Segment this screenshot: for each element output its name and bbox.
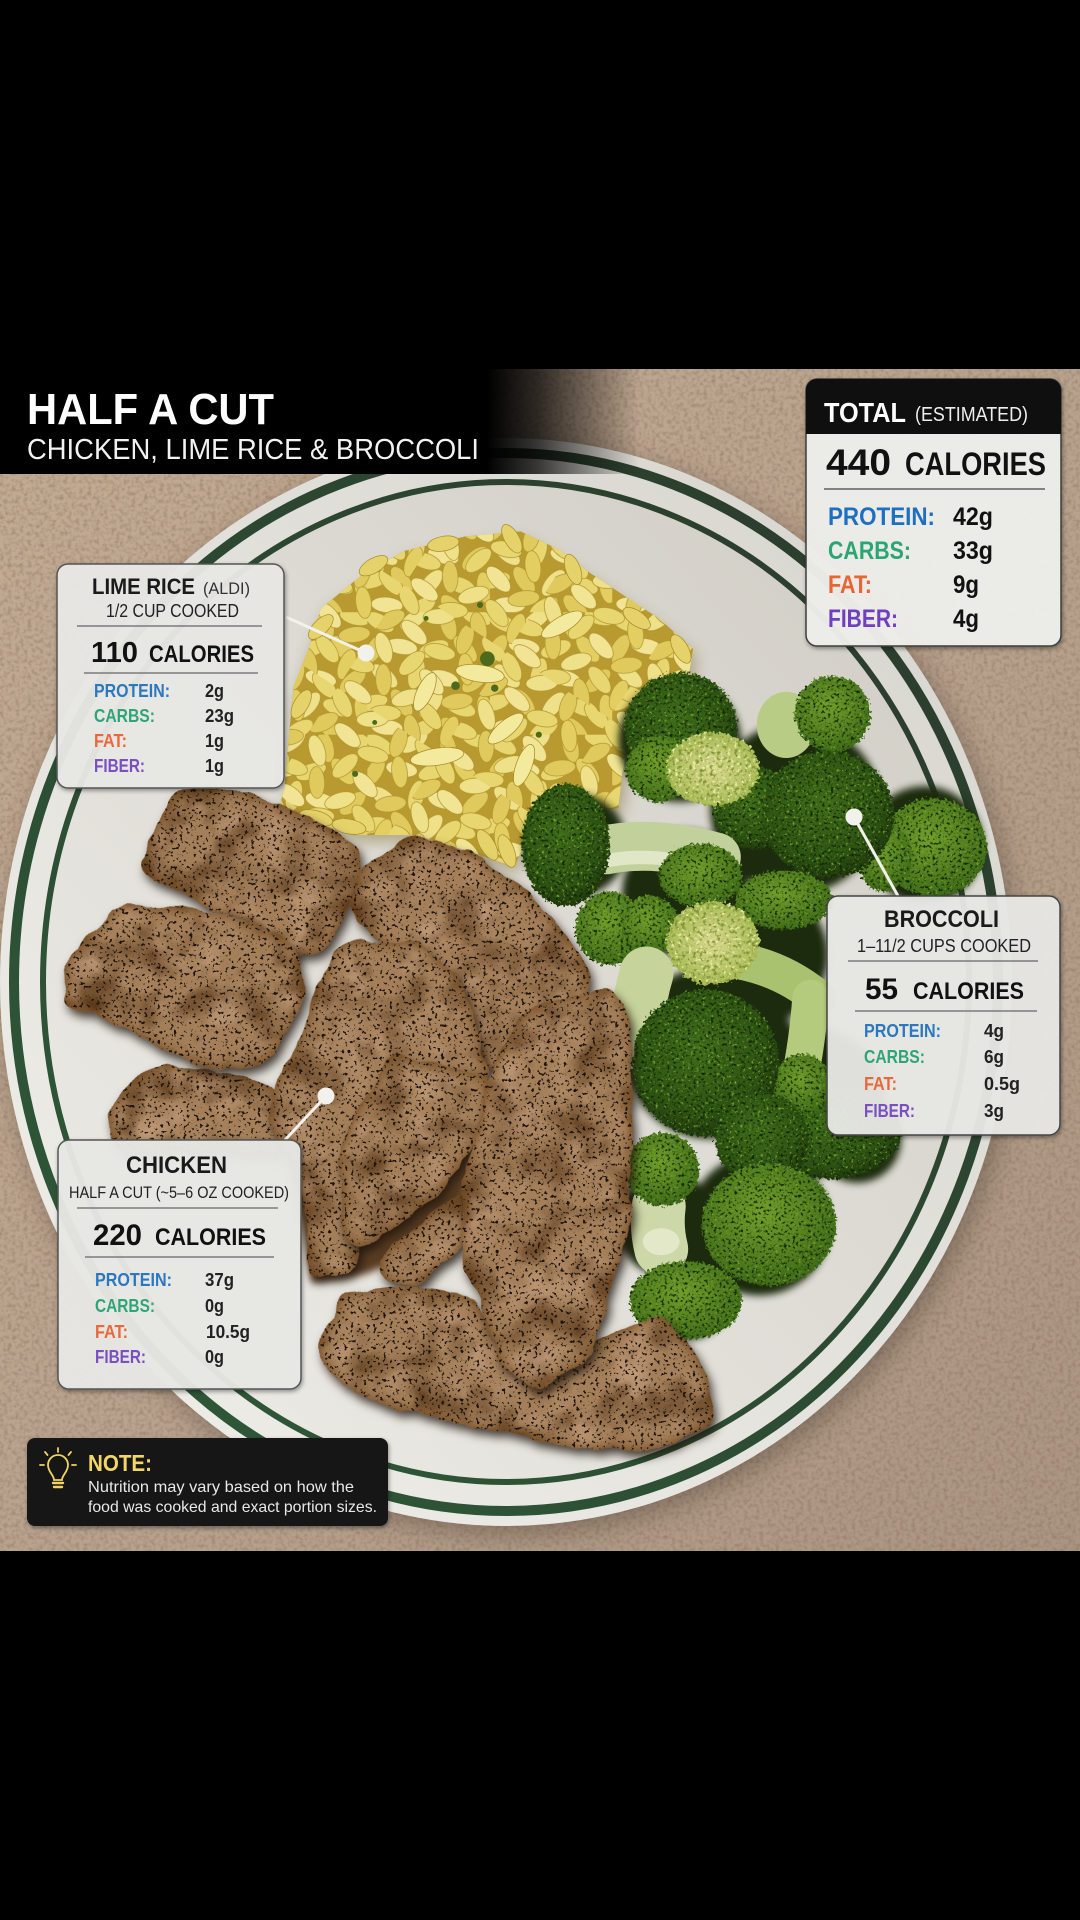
lime rice calories <box>91 637 254 669</box>
card body <box>58 1140 301 1389</box>
broccoli: pale head centre <box>666 901 759 984</box>
broccoli: centre dark floret <box>711 765 779 851</box>
total macros: 9g <box>953 571 979 599</box>
chicken calories: 220 <box>93 1219 142 1252</box>
broccoli macros: PROTEIN: <box>864 1021 941 1041</box>
chicken macros: FAT: <box>95 1322 128 1342</box>
broccoli: pale tube <box>658 1206 661 1249</box>
chicken macros: 37g <box>205 1270 234 1290</box>
chicken macros: CARBS: <box>95 1296 155 1316</box>
lime rice macros: PROTEIN: <box>94 681 170 701</box>
total calories: CALORIES <box>905 446 1046 482</box>
card header <box>806 379 1061 434</box>
subtitle: CHICKEN, LIME RICE & BROCCOLI <box>27 434 479 466</box>
icon: light bulb <box>40 1448 76 1487</box>
lime rice heading <box>92 574 250 621</box>
chicken piece: bottom <box>320 1286 710 1450</box>
chicken piece: small <box>383 1190 468 1288</box>
lime rice macros: 2g <box>205 681 224 701</box>
lime rice calories: 110 <box>91 637 138 669</box>
broccoli <box>522 672 987 1340</box>
chicken piece: left <box>61 904 306 1070</box>
chicken piece: centre left strip <box>264 940 490 1283</box>
connector: chicken <box>285 1088 334 1140</box>
lime rice macros: FIBER: <box>94 756 145 776</box>
broccoli: bottom floret <box>629 1261 742 1340</box>
broccoli: left dark floret <box>522 784 610 906</box>
broccoli macros: FAT: <box>864 1074 897 1094</box>
lime rice macros: CARBS: <box>94 706 155 726</box>
plate <box>0 438 1012 1526</box>
panel: lime rice <box>57 564 284 788</box>
broccoli macros: CARBS: <box>864 1047 925 1067</box>
chicken piece: lower left <box>104 1063 288 1157</box>
chicken <box>61 789 710 1450</box>
broccoli macros: 0.5g <box>984 1074 1020 1094</box>
card header: TOTAL <box>824 397 906 428</box>
chicken heading: CHICKEN <box>126 1152 227 1179</box>
broccoli macros: 3g <box>984 1101 1004 1121</box>
title: HALF A CUT <box>27 385 274 434</box>
broccoli heading: BROCCOLI <box>884 906 999 933</box>
chicken calories: CALORIES <box>155 1224 266 1251</box>
plate shadow <box>6 446 1018 1534</box>
total macros: 33g <box>953 537 993 565</box>
lime rice heading: 1/2 CUP COOKED <box>106 601 239 621</box>
chicken macros: PROTEIN: <box>95 1270 172 1290</box>
note heading: NOTE: <box>88 1450 152 1476</box>
total macros: FIBER: <box>828 605 898 633</box>
photo: plate of food on table <box>0 369 1080 1551</box>
chicken macros: FIBER: <box>95 1347 146 1367</box>
broccoli heading: 1–11/2 CUPS COOKED <box>857 936 1031 956</box>
broccoli macros: 4g <box>984 1021 1004 1041</box>
total macros: 42g <box>953 503 993 531</box>
total calories: 440 <box>826 442 891 483</box>
chicken piece: centre top <box>347 836 594 1070</box>
chicken piece: centre lump <box>343 1053 492 1247</box>
card header: (ESTIMATED) <box>915 404 1028 426</box>
rice <box>269 520 710 876</box>
chicken macros: 0g <box>205 1347 224 1367</box>
lime rice heading: LIME RICE <box>92 574 195 599</box>
note text <box>88 1479 377 1516</box>
card body <box>806 379 1061 646</box>
chicken macros: 0g <box>205 1296 224 1316</box>
broccoli: left stems <box>606 846 716 864</box>
chicken macros: 10.5g <box>206 1322 250 1342</box>
broccoli calories <box>865 973 1024 1006</box>
title bar <box>0 369 640 474</box>
broccoli shadow base <box>524 680 983 1340</box>
chicken piece: big upright <box>460 987 629 1393</box>
broccoli: lower right floret <box>796 1101 902 1180</box>
broccoli: top-right floret with pale lump <box>757 692 816 758</box>
broccoli macros: 6g <box>984 1047 1004 1067</box>
food, drawn in 882-wide coordinates <box>61 520 987 1450</box>
lime rice heading: (ALDI) <box>203 579 250 598</box>
broccoli calories: CALORIES <box>913 978 1024 1005</box>
total calories <box>826 442 1046 483</box>
broccoli: middle florets <box>735 871 833 929</box>
broccoli macros: FIBER: <box>864 1101 915 1121</box>
total macros: PROTEIN: <box>828 503 935 531</box>
broccoli: top dark floret <box>622 670 739 753</box>
table surface <box>0 369 1080 1551</box>
note text: Nutrition may vary based on how the <box>88 1479 354 1496</box>
lime rice macros: FAT: <box>94 731 127 751</box>
connector: lime rice <box>286 617 374 662</box>
panel: broccoli <box>827 896 1060 1135</box>
lime rice calories: CALORIES <box>149 641 254 668</box>
connector: broccoli <box>846 808 898 896</box>
chicken macros <box>95 1270 250 1367</box>
broccoli: lower floret <box>702 1163 836 1286</box>
note text: food was cooked and exact portion sizes. <box>88 1499 377 1516</box>
total macros: 4g <box>953 605 979 633</box>
broccoli: pale head top <box>666 732 759 806</box>
chicken piece: top left <box>142 789 365 960</box>
chicken heading <box>69 1152 289 1202</box>
broccoli heading <box>857 906 1031 956</box>
broccoli macros <box>864 1021 1020 1121</box>
total macros: FAT: <box>828 571 872 599</box>
total macros <box>828 503 993 633</box>
card body <box>827 896 1060 1135</box>
panel: chicken <box>58 1140 301 1389</box>
lime rice macros <box>94 681 234 776</box>
chicken pile shadow base <box>279 949 484 1283</box>
total macros: CARBS: <box>828 537 911 565</box>
lime rice macros: 23g <box>205 706 234 726</box>
broccoli calories: 55 <box>865 973 898 1006</box>
callout: note <box>27 1438 388 1526</box>
broccoli: pale stalks <box>638 961 818 1108</box>
broccoli: big dark floret <box>632 989 779 1136</box>
chicken calories <box>93 1219 266 1252</box>
lime rice macros: 1g <box>205 731 224 751</box>
card body <box>57 564 284 788</box>
panel: total <box>806 379 1061 646</box>
broccoli: right light floret <box>879 798 987 896</box>
chicken heading: HALF A CUT (~5–6 OZ COOKED) <box>69 1183 289 1202</box>
lime rice macros: 1g <box>205 756 224 776</box>
